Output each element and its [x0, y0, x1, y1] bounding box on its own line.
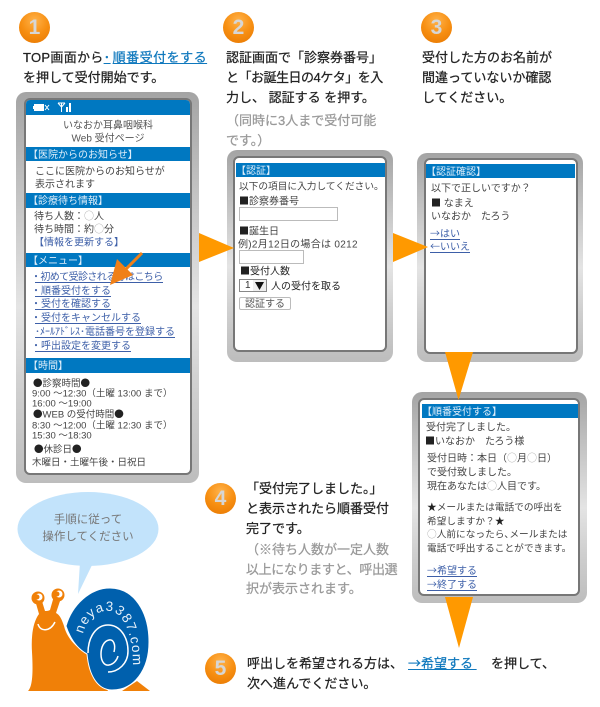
step 1 instruction [23, 50, 208, 85]
header bar [236, 163, 385, 177]
step 5 instruction [247, 653, 555, 691]
phone 3: confirmation [417, 153, 583, 362]
yes and no links: ←いいえ [430, 238, 470, 253]
select box [239, 279, 267, 292]
call notice [427, 500, 571, 555]
clinic title [63, 120, 153, 144]
step 2 instruction [226, 50, 383, 148]
call notice: 電話で呼出することができます。 [427, 544, 571, 555]
hours text: 9:00 ～12:30（土曜 13:00 まで） [32, 388, 172, 400]
submit button [239, 297, 291, 310]
step 3 instruction [422, 50, 552, 105]
step 3 number badge: 3 [431, 16, 442, 39]
icon: pointer arrow to menu item [110, 252, 143, 285]
call notice: 希望しますか？★ [427, 513, 504, 527]
section: hours [26, 358, 190, 373]
step 2 instruction: 力し、 認証する を押す。 [226, 90, 375, 105]
step 2 number badge: 2 [233, 16, 244, 39]
call links [427, 562, 477, 591]
icon: dropdown arrow [253, 280, 266, 291]
section: clinic notice [26, 147, 190, 161]
field: birthday: ■誕生日 [239, 222, 279, 238]
header bar [422, 404, 578, 418]
step 2 instruction: です。） [226, 133, 270, 148]
call notice: ○人前になったら､メールまたは [427, 527, 567, 541]
phone 4: reception complete [412, 392, 587, 603]
field: ticket number: ■診察券番号 [239, 192, 299, 208]
call links: →希望する [427, 562, 477, 577]
section: clinic notice: 【医院からのお知らせ】 [28, 150, 138, 161]
step 2 instruction: と「お誕生日の4ケタ」を入 [226, 70, 383, 85]
section: waiting info [26, 193, 190, 208]
menu links: ・受付をキャンセルする [31, 313, 141, 324]
reception time text: 受付日時：本日（○月○日） [427, 450, 557, 464]
submit button: 認証する [245, 299, 285, 310]
step 5 instruction: 次へ進んでください。 [247, 676, 376, 691]
clinic title: Web 受付ページ [72, 134, 144, 144]
snail: neya3387.com [76, 602, 140, 664]
hours text: 木曜日・土曜午後・日祝日 [32, 458, 146, 468]
section: waiting info: 【診療待ち情報】 [28, 196, 108, 207]
speech bubble: 手順に従って [54, 512, 122, 526]
reception confirmation [427, 466, 546, 492]
hours text [32, 376, 172, 468]
waiting info text: 【情報を更新する】 [34, 238, 124, 248]
text: →希望する [408, 653, 473, 672]
header bar: 【順番受付する】 [422, 407, 502, 418]
step 4 number badge [205, 483, 236, 514]
step 5 instruction: 呼出しを希望される方は、 [247, 656, 403, 671]
speech bubble [18, 492, 158, 594]
waiting info text [34, 208, 124, 248]
reception confirmation: 現在あなたは○人目です。 [427, 478, 546, 492]
step 4 instruction: 以上になりますと、呼出選 [246, 562, 397, 577]
step 1 number badge: 1 [29, 16, 40, 39]
prompt: 以下の項目に入力してください。 [239, 182, 384, 192]
hours text: ●WEB の受付時間● [33, 406, 124, 420]
snail [28, 588, 150, 691]
hours text: ●休診日● [34, 442, 82, 456]
step 1 number badge [19, 12, 50, 43]
step 2 instruction: 認証画面で「診察券番号」 [226, 50, 382, 65]
menu links [31, 271, 175, 352]
select box: 1 [245, 280, 251, 291]
birthday input [239, 250, 304, 264]
step 3 instruction: 受付した方のお名前が [422, 50, 552, 65]
step 2 instruction: （同時に3人まで受付可能 [226, 113, 376, 128]
icon: battery and antenna [33, 102, 71, 112]
notice text: ここに医院からのお知らせが [35, 166, 165, 178]
step 4 instruction: 択が表示されます。 [246, 581, 362, 596]
menu links: ・受付を確認する [31, 299, 111, 310]
step 5 number badge: 5 [215, 657, 226, 680]
hours text: 16:00 ～19:00 [32, 398, 92, 410]
yes and no links: →はい [430, 225, 460, 240]
waiting info text: 待ち時間：約○分 [34, 220, 114, 236]
step 3 number badge [421, 12, 452, 43]
menu links: ･ﾒｰﾙｱﾄﾞﾚｽ･電話番号を登録する [35, 327, 175, 338]
step 4 number badge: 4 [215, 487, 226, 510]
completion text: 受付完了しました。 [426, 422, 516, 434]
step 4 instruction: 「受付完了しました。」 [246, 481, 383, 496]
notice text [35, 166, 165, 190]
menu links: ・順番受付をする [31, 286, 111, 296]
step 4 instruction: と表示されたら順番受付 [246, 501, 389, 516]
select label: 人の受付を取る [271, 282, 341, 292]
step 1 instruction: を押して受付開始です。 [23, 70, 164, 85]
step 1 instruction: TOP画面から･順番受付をする [23, 50, 207, 65]
name field: ■ なまえ [431, 194, 474, 210]
section: menu [26, 253, 190, 267]
snail mascot with speech bubble [18, 492, 158, 691]
step 4 instruction: （※待ち人数が一定人数 [246, 542, 389, 557]
waiting info text: 待ち人数：○人 [34, 208, 104, 222]
header bar: 【認証】 [236, 166, 276, 177]
ticket number input [239, 207, 338, 221]
arrow: step 1 to step 2 [199, 233, 234, 262]
field: number of people: ■受付人数 [240, 262, 290, 278]
section: hours: 【時間】 [28, 361, 68, 372]
menu links: ・初めて受診される方はこちら [31, 272, 163, 283]
reception confirmation: で受付致しました。 [427, 468, 517, 478]
arrow: step 3 to complete screen [445, 352, 473, 400]
section: menu: 【メニュー】 [28, 256, 88, 267]
yes and no links [430, 225, 470, 253]
header bar: 【認証確認】 [426, 167, 486, 178]
call links: →終了する [427, 576, 477, 591]
name field: いなおか たろう [431, 211, 510, 222]
step 4 instruction: 完了です。 [246, 521, 310, 536]
step 2 number badge [223, 12, 254, 43]
step 4 instruction [246, 481, 398, 596]
text: を押して、 [491, 656, 555, 671]
menu links: ・呼出設定を変更する [31, 341, 131, 352]
call notice: ★メールまたは電話での呼出を [427, 500, 563, 514]
hours text: ●診察時間● [33, 376, 90, 390]
status bar [26, 100, 190, 115]
hours text: 8:30 ～12:00（土曜 12:30 まで） [32, 420, 172, 432]
confirmation text: 以下で正しいですか？ [431, 184, 531, 194]
name field [431, 194, 510, 222]
step 5 number badge [205, 653, 236, 684]
phone 2: authentication [227, 150, 393, 362]
patient name: ■いなおか たろう様 [425, 432, 524, 448]
step 3 instruction: してください。 [422, 90, 512, 105]
clinic title: いなおか耳鼻咽喉科 [63, 120, 153, 132]
notice text: 表示されます [35, 179, 95, 190]
hours text: 15:30 ～18:30 [32, 430, 92, 442]
step 3 instruction: 間違っていないか確認 [422, 70, 551, 85]
phone 1: top page [16, 92, 199, 483]
birthday example: 例)2月12日の場合は 0212 [238, 240, 358, 250]
header bar [426, 164, 575, 178]
arrow: complete screen to step 5 [445, 597, 473, 648]
arrow: step 2 to step 3 [393, 233, 428, 262]
speech bubble: 操作してください [42, 529, 134, 543]
